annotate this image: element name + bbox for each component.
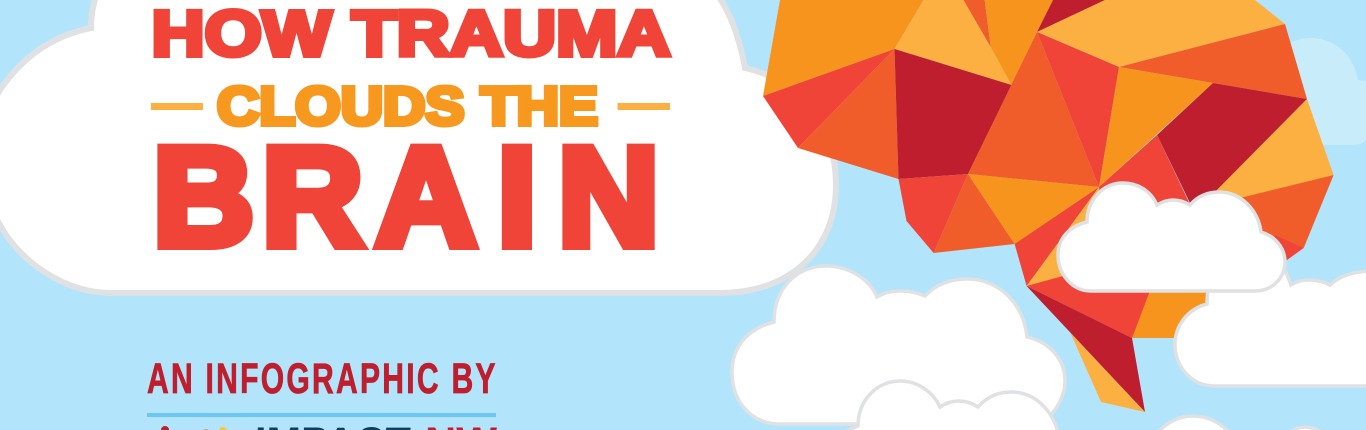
title line: brain: BRAIN bbox=[153, 118, 659, 275]
title bbox=[151, 0, 670, 275]
title line: clouds the bbox=[151, 76, 670, 136]
pale background cloud bbox=[1260, 38, 1366, 145]
logo: impact nw bbox=[161, 418, 497, 430]
cloud: bottom right peek bbox=[1285, 427, 1326, 430]
cloud: front bottom bbox=[844, 381, 1059, 430]
cloud: bottom right small bbox=[1155, 416, 1232, 430]
title line: clouds the: CLOUDS THE bbox=[217, 76, 598, 136]
byline: an infographic by: AN INFOGRAPHIC BY bbox=[147, 354, 498, 402]
cloud: main title cloud bbox=[0, 0, 836, 293]
illustration: low-poly brain bbox=[763, 0, 1334, 412]
cloud: overlapping brain bbox=[1058, 183, 1285, 291]
byline rule bbox=[147, 413, 496, 417]
cloud: centre large bbox=[732, 266, 1065, 424]
cloud: right edge bbox=[1175, 240, 1366, 386]
